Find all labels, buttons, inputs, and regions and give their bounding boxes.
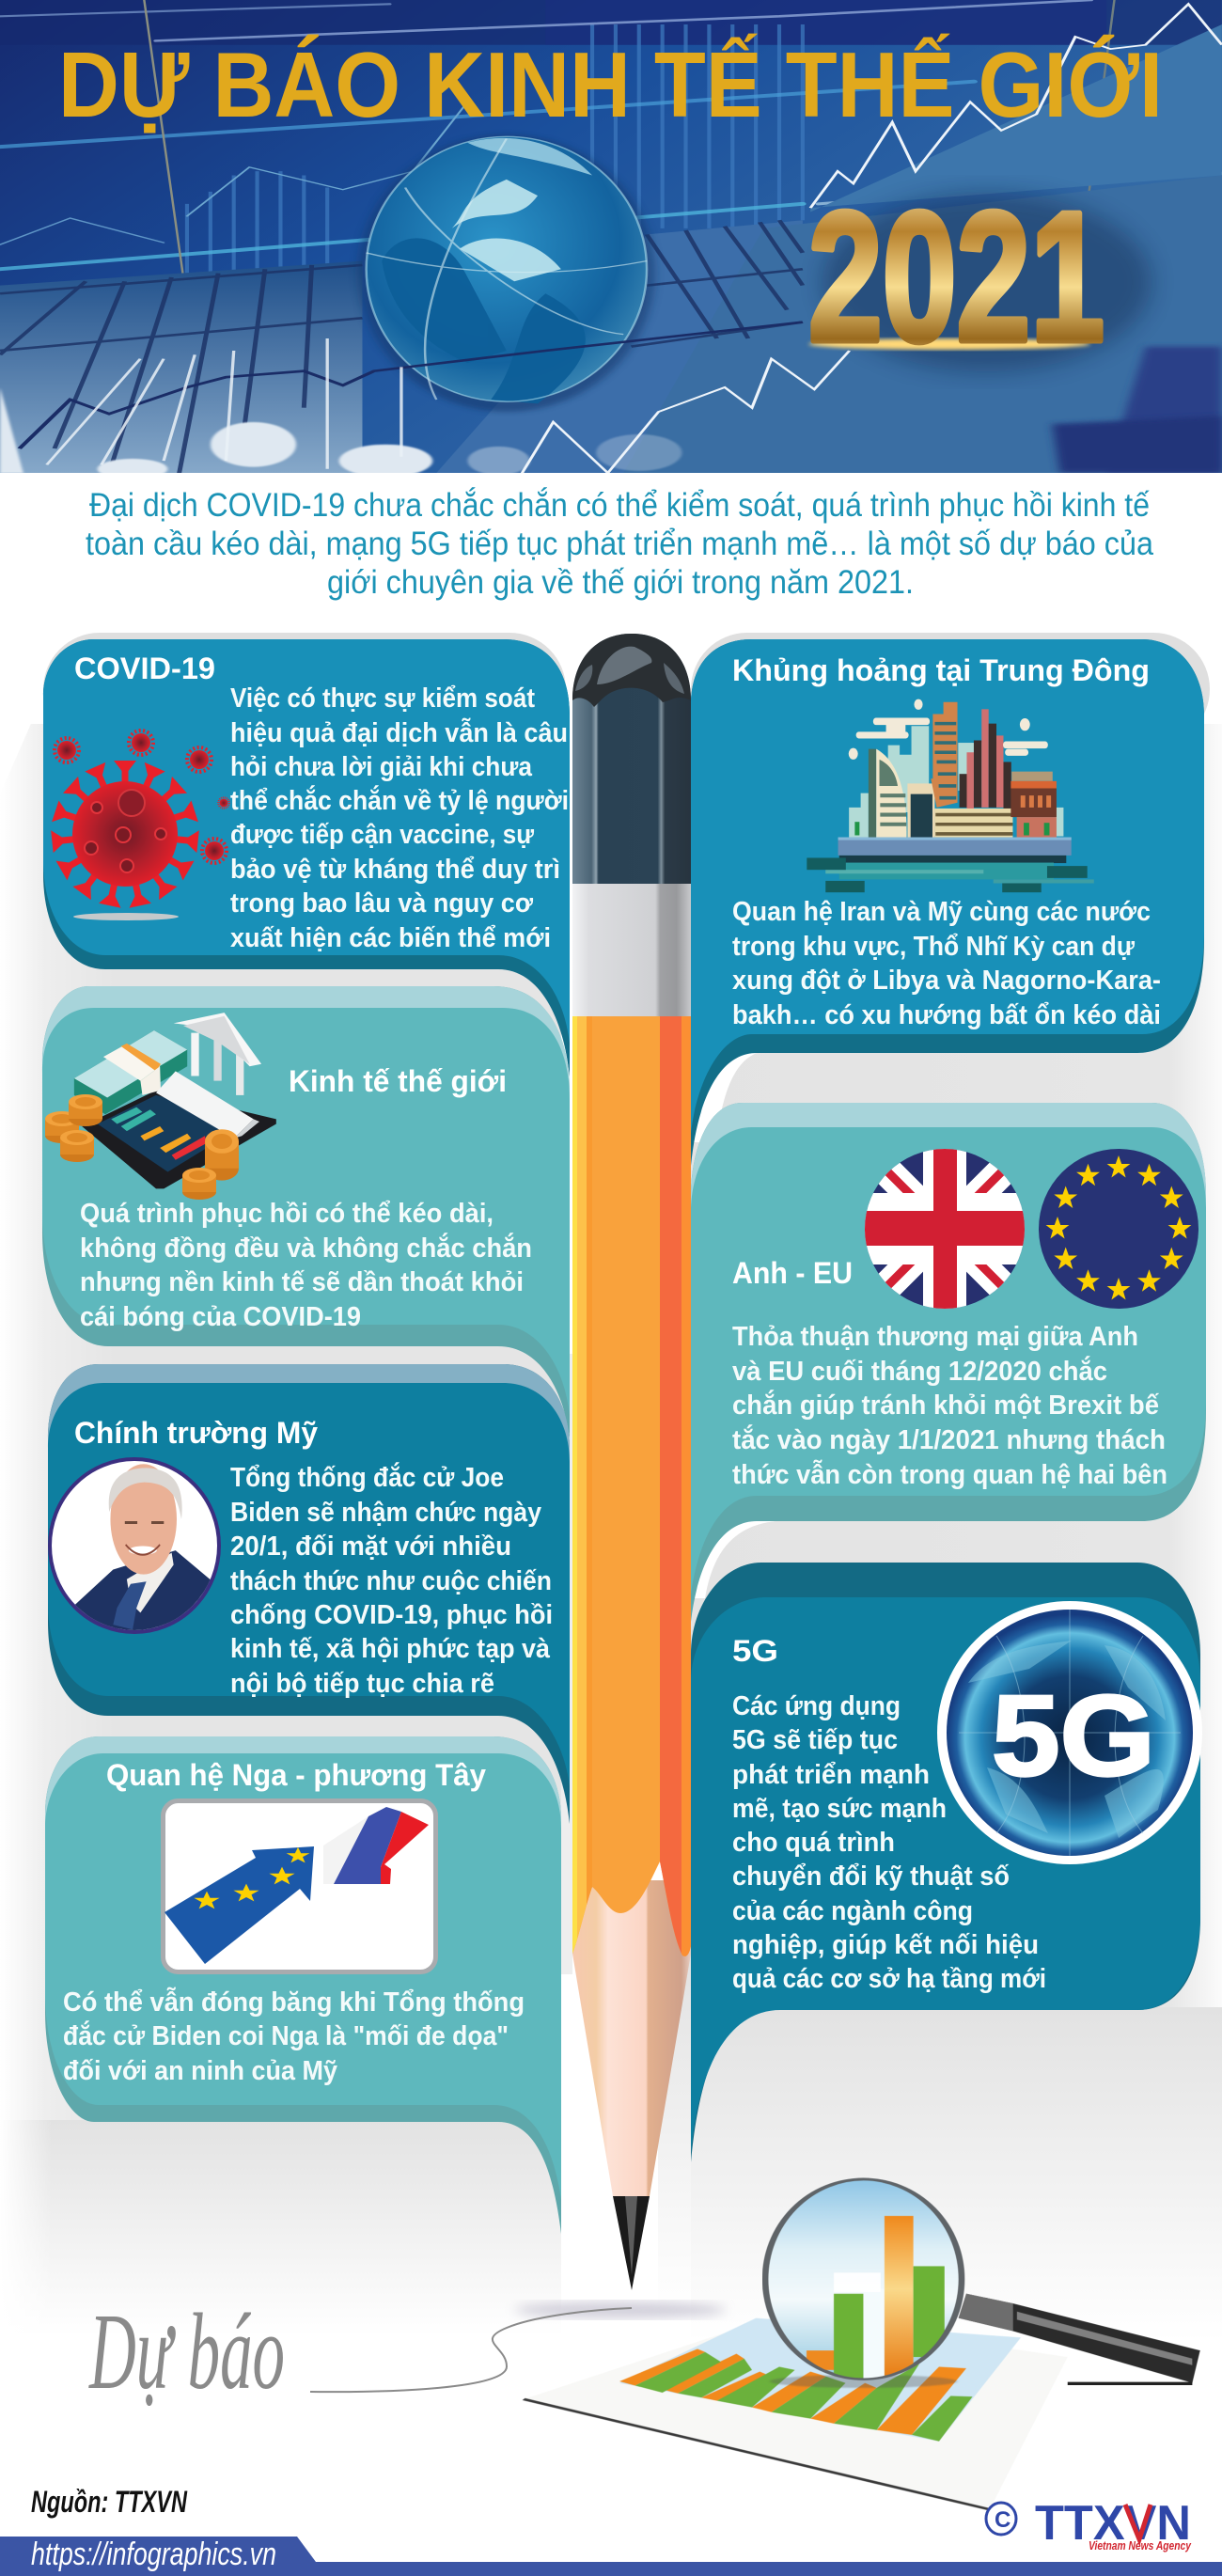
body text: cái bóng của COVID-19 xyxy=(80,1302,361,1332)
year 2021 in gold: 2021 xyxy=(808,174,1104,380)
body text xyxy=(80,1199,532,1332)
body text: đắc cử Biden coi Nga là "mối đe dọa" xyxy=(63,2019,509,2051)
body text: hỏi chưa lời giải khi chưa xyxy=(230,752,533,782)
body text: chắn giúp tránh khỏi một Brexit bế xyxy=(732,1389,1160,1421)
icon: EU flag xyxy=(1039,1149,1198,1309)
background shadows xyxy=(0,633,1222,2350)
intro text: Đại dịch COVID-19 chưa chắc chắn có thể kiểm soát, quá trình phục hồi kinh tế xyxy=(89,487,1150,524)
icon: coin stacks xyxy=(45,1094,239,1200)
magnifier and chart xyxy=(524,2179,1200,2509)
body text: trong khu vực, Thổ Nhĩ Kỳ can dự xyxy=(732,932,1135,962)
body text: Các ứng dụng xyxy=(732,1691,901,1721)
body text: bakh… có xu hướng bất ổn kéo dài xyxy=(732,1000,1161,1030)
body text: nội bộ tiếp tục chia rẽ xyxy=(230,1669,494,1699)
body text: không đồng đều và không chắc chắn xyxy=(80,1232,532,1264)
heading: Kinh tế thế giới xyxy=(289,1064,507,1098)
body text: Quá trình phục hồi có thể kéo dài, xyxy=(80,1199,494,1229)
body text: đối với an ninh của Mỹ xyxy=(63,2056,337,2086)
icon: UK flag xyxy=(865,1149,1025,1309)
source: Nguồn: TTXVN xyxy=(31,2485,188,2519)
panel: 5G xyxy=(691,1563,1202,2162)
body text: Có thể vẫn đóng băng khi Tổng thống xyxy=(63,1986,525,2018)
panel: COVID-19 xyxy=(43,639,570,1076)
body text: của các ngành công xyxy=(732,1896,973,1926)
body text xyxy=(732,897,1161,1030)
logo: TTXVN: C xyxy=(995,2507,1010,2533)
intro text xyxy=(86,487,1153,601)
body text: tắc vào ngày 1/1/2021 nhưng thách xyxy=(732,1423,1166,1455)
body text: xung đột ở Libya và Nagorno-Kara- xyxy=(732,966,1161,996)
body text xyxy=(732,1691,1046,1994)
icon: 5G globe xyxy=(937,1601,1202,1864)
portrait: Joe Biden xyxy=(50,1459,219,1632)
body text: quả các cơ sở hạ tầng mới xyxy=(732,1964,1046,1994)
pen stroke line xyxy=(310,2308,632,2392)
footer bar: https://infographics.vn xyxy=(31,2537,276,2572)
logo: TTXVN: Vietnam News Agency xyxy=(1089,2538,1192,2552)
body text xyxy=(63,1986,525,2086)
heading: 5G xyxy=(732,1634,778,1668)
body text: Việc có thực sự kiểm soát xyxy=(230,683,535,714)
panel: Quan hệ Nga - phương Tây xyxy=(45,1736,561,2234)
body text: 5G sẽ tiếp tục xyxy=(732,1725,898,1755)
body text: nhưng nền kinh tế sẽ dần thoát khỏi xyxy=(80,1267,524,1297)
body text: thức vẫn còn trong quan hệ hai bên xyxy=(732,1458,1167,1490)
panel: Chính trường Mỹ xyxy=(48,1364,570,1824)
body text: nghiệp, giúp kết nối hiệu xyxy=(732,1930,1039,1960)
pencil xyxy=(572,634,691,2290)
body text xyxy=(230,683,569,953)
body text: Thỏa thuận thương mại giữa Anh xyxy=(732,1322,1138,1352)
body text: chống COVID-19, phục hồi xyxy=(230,1600,553,1630)
heading: Quan hệ Nga - phương Tây xyxy=(106,1758,486,1792)
icon: 5G globe: 5G xyxy=(992,1672,1155,1799)
body text: phát triển mạnh xyxy=(732,1760,930,1790)
heading: Chính trường Mỹ xyxy=(74,1416,318,1450)
footer bar xyxy=(0,2537,1222,2576)
body text xyxy=(732,1322,1167,1490)
body text: Biden sẽ nhậm chức ngày xyxy=(230,1498,541,1528)
icon: money, bank and tablet xyxy=(74,1013,276,1188)
body text: chuyển đổi kỹ thuật số xyxy=(732,1861,1010,1892)
header photo: financial chart with globe xyxy=(0,0,1222,479)
body text: xuất hiện các biến thể mới xyxy=(230,923,551,953)
panel: Khủng hoảng tại Trung Đông xyxy=(691,639,1204,1166)
body text: được tiếp cận vaccine, sự xyxy=(230,820,534,850)
body text: mẽ, tạo sức mạnh xyxy=(732,1794,947,1824)
body text: Quan hệ Iran và Mỹ cùng các nước xyxy=(732,897,1151,927)
intro text: giới chuyên gia về thế giới trong năm 2021. xyxy=(327,564,914,601)
icon: coronavirus xyxy=(51,730,229,920)
heading: COVID-19 xyxy=(74,652,215,685)
image: EU arrow vs Russia arrow xyxy=(164,1801,436,1972)
body text: thách thức như cuộc chiến xyxy=(230,1566,552,1596)
panel: Anh - EU xyxy=(691,1103,1206,1622)
body text: kinh tế, xã hội phức tạp và xyxy=(230,1634,551,1664)
heading: Khủng hoảng tại Trung Đông xyxy=(732,653,1150,687)
logo: TTXVN: TTXVN xyxy=(1035,2496,1191,2551)
body text xyxy=(230,1461,553,1699)
intro text: toàn cầu kéo dài, mạng 5G tiếp tục phát triển mạnh mẽ… là một số dự báo của xyxy=(86,526,1153,562)
body text: bảo vệ từ kháng thể duy trì xyxy=(230,855,560,885)
handwritten word: Dự báo: Dự báo xyxy=(88,2292,285,2411)
pen shadow on paper xyxy=(515,2301,726,2318)
body text: thể chắc chắn về tỷ lệ người xyxy=(230,784,569,816)
body text: cho quá trình xyxy=(732,1828,895,1858)
body text: Tổng thống đắc cử Joe xyxy=(230,1461,504,1493)
body text: 20/1, đối mặt với nhiều xyxy=(230,1531,511,1562)
icon: city skyline xyxy=(807,699,1094,892)
panel: Kinh tế thế giới xyxy=(42,986,570,1438)
body text: và EU cuối tháng 12/2020 chắc xyxy=(732,1355,1107,1387)
heading: Anh - EU xyxy=(732,1256,853,1290)
body text: hiệu quả đại dịch vẫn là câu xyxy=(230,716,568,748)
body text: trong bao lâu và nguy cơ xyxy=(230,888,533,919)
